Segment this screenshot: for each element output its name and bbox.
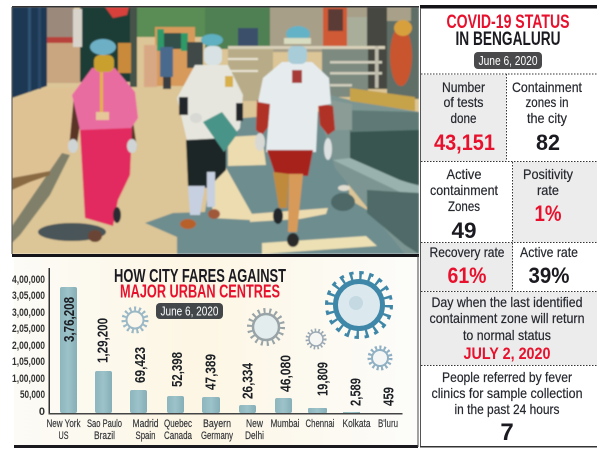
category labels: Madrid xyxy=(132,418,158,430)
stat: number of tests: Number xyxy=(442,79,485,95)
woman's ground shadow xyxy=(38,223,106,241)
category labels xyxy=(46,418,398,442)
y axis labels: 0 xyxy=(39,406,45,418)
category labels: Delhi xyxy=(245,430,264,442)
brick building xyxy=(47,7,82,83)
stat: containment zones: Containment xyxy=(512,79,582,95)
y axis labels: 2,00,000 xyxy=(12,340,45,352)
value labels: 46,080 xyxy=(278,355,294,392)
green and orange kiosk xyxy=(144,27,203,89)
category labels: Spain xyxy=(136,430,156,442)
stat: last containment zone date: JULY 2, 2020 xyxy=(464,344,550,363)
stat: recovery rate: 61% xyxy=(448,263,486,288)
virus illustration: small left xyxy=(124,309,146,331)
stat: last containment zone date: to normal status xyxy=(463,327,551,343)
category labels: New York xyxy=(46,418,81,430)
value labels: 1,29,200 xyxy=(94,318,112,363)
y axis labels: 1,00,000 xyxy=(12,373,45,385)
stat: number of tests xyxy=(434,79,495,155)
red sign xyxy=(105,7,129,18)
stat: containment zones: the city xyxy=(527,110,567,126)
person: woman in pink sari xyxy=(68,39,138,242)
y axis labels: 50,000 xyxy=(20,389,45,401)
y axis labels: 4,00,000 xyxy=(12,274,45,286)
category labels: Germany xyxy=(201,430,233,442)
y axis labels: 3,05,000 xyxy=(12,290,45,302)
stat: fever clinic referrals xyxy=(432,369,582,446)
stat: active containment zones xyxy=(430,166,498,243)
stat: recovery rate xyxy=(430,244,505,288)
value labels: 52,398 xyxy=(169,352,186,387)
value labels xyxy=(61,297,398,406)
stat: active rate: 39% xyxy=(528,263,570,288)
stat: active containment zones: Zones xyxy=(448,198,480,214)
stat: fever clinic referrals: 7 xyxy=(500,419,514,446)
virus illustration: small right xyxy=(370,348,390,368)
virus illustration: small centre xyxy=(308,330,324,348)
value labels: 69,423 xyxy=(132,347,149,383)
statue xyxy=(387,7,419,99)
stone ledge xyxy=(350,88,415,111)
value labels: 3,76,208 xyxy=(61,297,78,342)
sidebar date pill: June 6, 2020 xyxy=(478,53,538,68)
panel bottom bar xyxy=(14,445,418,448)
stat: active containment zones: 49 xyxy=(452,218,476,243)
category labels: US xyxy=(58,430,68,442)
footpath kerb xyxy=(12,152,70,243)
chart heading: HOW CITY FARES AGAINST xyxy=(114,266,286,286)
category labels: Canada xyxy=(164,430,193,442)
category labels: B'luru xyxy=(378,418,398,430)
stat: fever clinic referrals: in the past 24 hours xyxy=(454,401,560,417)
y axis labels: 1,05,000 xyxy=(12,356,45,368)
chart date pill: June 6, 2020 xyxy=(160,304,218,318)
stat: recovery rate: Recovery rate xyxy=(430,244,505,260)
photo left edge xyxy=(12,7,13,254)
stone plinth xyxy=(322,95,419,254)
sidebar borders xyxy=(420,5,597,448)
stat: positivity rate: 1% xyxy=(534,201,562,226)
category labels: Sao Paulo xyxy=(87,418,122,430)
value labels: 26,334 xyxy=(240,362,256,399)
person: middle with folder xyxy=(177,34,243,229)
stat: containment zones xyxy=(512,79,582,155)
panel: chart background xyxy=(14,257,418,445)
stat: positivity rate: Positivity xyxy=(523,166,573,182)
photo top edge xyxy=(12,6,419,8)
stat: fever clinic referrals: People referred by fever xyxy=(442,369,572,385)
stat: active rate xyxy=(520,244,578,288)
stat: last containment zone date xyxy=(430,294,584,363)
panel right border xyxy=(418,255,419,447)
stat: fever clinic referrals: clinics for sample collection xyxy=(432,385,582,401)
panel: photo of health workers walking xyxy=(12,7,419,254)
panel: Bengaluru status sidebar xyxy=(420,5,597,448)
value labels: 47,389 xyxy=(202,354,220,390)
value labels: 459 xyxy=(380,387,398,406)
cell backgrounds xyxy=(421,75,597,365)
chart heading: MAJOR URBAN CENTRES xyxy=(120,282,280,302)
virus illustration: grey medium xyxy=(250,311,282,343)
sidebar heading xyxy=(446,12,570,50)
y axis labels: 3,00,000 xyxy=(12,307,45,319)
bar chart xyxy=(12,268,402,442)
building right xyxy=(228,8,388,102)
stat: active containment zones: Active xyxy=(446,166,482,182)
category labels: Bayern xyxy=(203,418,231,430)
background trees xyxy=(80,7,270,82)
sidebar heading: IN BENGALURU xyxy=(456,29,560,50)
category labels: New xyxy=(246,418,263,430)
chart heading xyxy=(114,266,286,302)
pole xyxy=(130,7,137,87)
stat: containment zones: zones in xyxy=(526,94,568,110)
stat: active rate: Active rate xyxy=(520,244,578,260)
stat: number of tests: done xyxy=(450,110,477,126)
y axis labels xyxy=(12,274,45,418)
grey road right xyxy=(145,110,419,254)
panel top bar xyxy=(12,254,419,257)
virus illustration: large xyxy=(326,272,392,338)
stat: containment zones: 82 xyxy=(536,130,560,155)
bars xyxy=(60,287,360,413)
category labels: Mumbai xyxy=(270,418,300,430)
stat: active containment zones: containment xyxy=(430,182,498,198)
stat: positivity rate: rate xyxy=(537,182,559,198)
stat: number of tests: 43,151 xyxy=(434,130,495,155)
y axis labels: 2,05,000 xyxy=(12,323,45,335)
category labels: Brazil xyxy=(94,430,115,442)
category labels: Chennai xyxy=(306,418,334,430)
category labels: Kolkata xyxy=(342,418,371,430)
railing xyxy=(228,46,385,88)
person: right in white coat xyxy=(255,26,335,247)
left blue wall xyxy=(12,7,47,98)
stat: number of tests: of tests xyxy=(444,94,484,110)
stat: last containment zone date: containment zone will return xyxy=(430,310,584,326)
axis lines xyxy=(48,268,402,414)
stat: positivity rate xyxy=(523,166,573,226)
value labels: 19,809 xyxy=(314,362,332,396)
category labels: Quebec xyxy=(164,418,192,430)
value labels: 2,589 xyxy=(348,378,364,406)
stat: last containment zone date: Day when the last identified xyxy=(432,294,582,310)
